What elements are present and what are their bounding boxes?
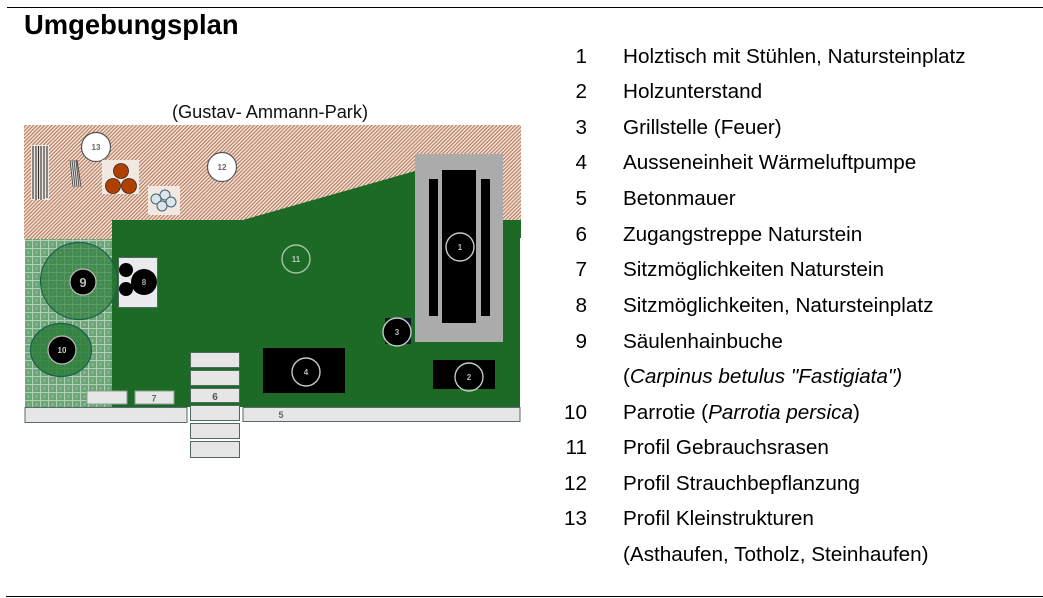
- item 13: small structures profile: [82, 132, 110, 162]
- legend item 9: Säulenhainbuche: [623, 330, 783, 353]
- item 5: concrete wall: [25, 408, 520, 422]
- item 9: hornbeam: 9: [79, 275, 87, 290]
- legend item 1: 1: [575, 45, 587, 68]
- legend item 5: Betonmauer: [623, 187, 736, 210]
- legend item 13: Profil Kleinstrukturen: [623, 507, 814, 530]
- legend item 11: Profil Gebrauchsrasen: [623, 436, 829, 459]
- item 2: shelter: [433, 360, 495, 391]
- hatched shrub area: [24, 125, 521, 240]
- legend item 6: 6: [575, 223, 587, 246]
- icon: grey stone pile: [148, 186, 180, 215]
- item 4: heat pump: [263, 348, 345, 393]
- legend item 3: Grillstelle (Feuer): [623, 116, 782, 139]
- legend item 6: Zugangstreppe Naturstein: [623, 223, 862, 246]
- planted area: [25, 239, 112, 407]
- legend item 7: 7: [575, 258, 587, 281]
- legend item 5: 5: [575, 187, 587, 210]
- legend item 3: 3: [575, 116, 587, 139]
- item 1: table and seating: 1: [458, 243, 463, 252]
- legend item 9: [575, 330, 902, 388]
- legend item 12: Profil Strauchbepflanzung: [623, 472, 860, 495]
- item 1: table and seating: [415, 154, 503, 342]
- item 13: small structures profile: 13: [92, 143, 101, 152]
- legend item 2: Holzunterstand: [623, 80, 762, 103]
- item 10: parrotia: 10: [58, 346, 67, 355]
- item 7: stone seats: [87, 391, 174, 404]
- legend item 10: 10: [564, 401, 587, 424]
- item 6: stairs: [190, 352, 240, 458]
- meadow lawn: [112, 171, 521, 407]
- item 6: stairs: 6: [212, 392, 218, 403]
- item 7: stone seats: 7: [151, 394, 157, 404]
- item 11: lawn profile: [282, 245, 310, 273]
- legend: [564, 45, 966, 566]
- legend item 7: Sitzmöglichkeiten Naturstein: [623, 258, 884, 281]
- icon: deadwood: [69, 160, 82, 187]
- item 4: heat pump: 4: [304, 368, 309, 377]
- item 3: fire pit: 3: [395, 328, 400, 337]
- item 9: hornbeam: [40, 242, 118, 320]
- site plan: [24, 125, 521, 458]
- icon: log pile: [31, 145, 49, 200]
- legend item 11: 11: [566, 436, 587, 459]
- item 10: parrotia: [30, 324, 92, 376]
- item 12: shrub profile: 12: [218, 163, 227, 172]
- item 12: shrub profile: [208, 152, 236, 182]
- legend item 4: Ausseneinheit Wärmeluftpumpe: [623, 151, 916, 174]
- item 11: lawn profile: 11: [292, 255, 301, 264]
- item 8: stone seats on plaza: [118, 258, 158, 308]
- legend item 9: 9: [575, 330, 587, 353]
- icon: brown stone pile: [102, 160, 139, 194]
- legend item 8: Sitzmöglichkeiten, Natursteinplatz: [623, 294, 933, 317]
- legend item 10: Parrotie (Parrotia persica): [623, 401, 860, 424]
- park label: (Gustav- Ammann-Park): [172, 102, 368, 122]
- legend item 13: 13: [564, 507, 587, 530]
- legend item 1: Holztisch mit Stühlen, Natursteinplatz: [623, 45, 966, 68]
- legend item 13: (Asthaufen, Totholz, Steinhaufen): [623, 543, 929, 566]
- legend item 9: (Carpinus betulus "Fastigiata"): [623, 365, 902, 388]
- legend item 12: 12: [564, 472, 587, 495]
- item 3: fire pit: [383, 318, 411, 346]
- item 5: concrete wall: 5: [278, 410, 284, 420]
- legend item 8: 8: [575, 294, 587, 317]
- title: Umgebungsplan: [24, 9, 239, 40]
- item 2: shelter: 2: [467, 373, 472, 382]
- legend item 2: 2: [575, 80, 587, 103]
- legend item 4: 4: [575, 151, 587, 174]
- item 8: stone seats on plaza: 8: [142, 278, 147, 287]
- legend item 13: [564, 507, 929, 566]
